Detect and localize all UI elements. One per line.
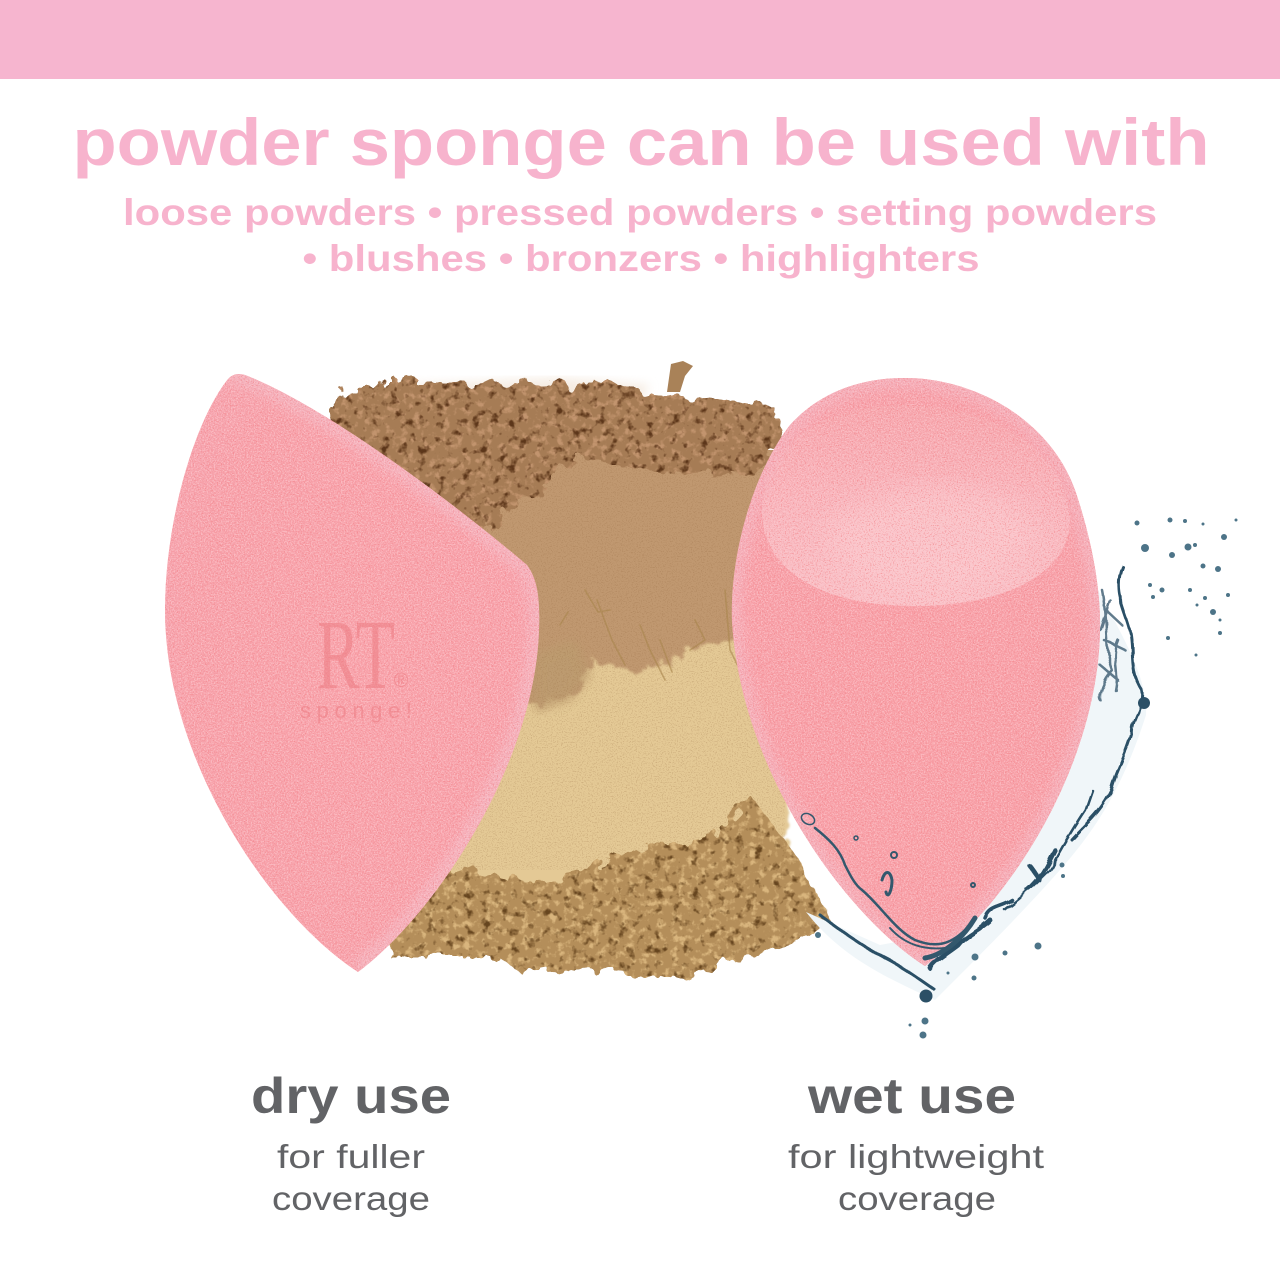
powder swatch	[322, 361, 830, 978]
mid powder darker patch	[535, 640, 590, 712]
powder cracks	[560, 590, 745, 680]
dry use caption: for fuller	[277, 1138, 425, 1175]
bottom crumbled powder	[390, 795, 830, 978]
loose crumb	[667, 361, 693, 392]
pressed tan powder	[440, 450, 785, 750]
product list: loose powders • pressed powders • setting powders	[123, 192, 1157, 233]
embossed RT logo: ®	[394, 670, 409, 692]
dry use caption: coverage	[272, 1180, 430, 1217]
top crumbled powder	[322, 361, 782, 545]
spray droplets	[815, 518, 1238, 1038]
right sponge (wet)	[728, 375, 1104, 970]
wet use caption	[788, 1068, 1044, 1217]
sponge grain	[728, 375, 1104, 970]
sponge bevel edge	[228, 374, 539, 972]
dry use caption	[251, 1068, 451, 1217]
pressed light powder	[430, 625, 790, 920]
faint dust behind top crumbs	[400, 378, 650, 400]
wet use caption: wet use	[807, 1068, 1016, 1124]
splash white body	[806, 590, 1146, 1000]
embossed RT logo	[300, 599, 412, 723]
splash dark strokes	[820, 566, 1143, 990]
wet use caption: for lightweight	[788, 1138, 1044, 1175]
embossed RT logo: sponge!	[300, 698, 412, 723]
water splash behind right sponge	[806, 518, 1238, 1038]
embossed RT logo: RT	[317, 599, 395, 710]
product list	[123, 192, 1157, 279]
left sponge (dry)	[160, 370, 545, 975]
droplets at splash edge	[920, 697, 1150, 1002]
title: powder sponge can be used with	[72, 105, 1210, 179]
wet use caption: coverage	[838, 1180, 996, 1217]
dry use caption: dry use	[251, 1068, 451, 1124]
product list: • blushes • bronzers • highlighters	[302, 238, 980, 279]
water on sponge	[799, 811, 975, 958]
sponge grain	[160, 370, 545, 975]
powder texture	[440, 450, 785, 870]
top pink banner	[0, 0, 1280, 79]
sponge flat top face	[728, 375, 1104, 970]
